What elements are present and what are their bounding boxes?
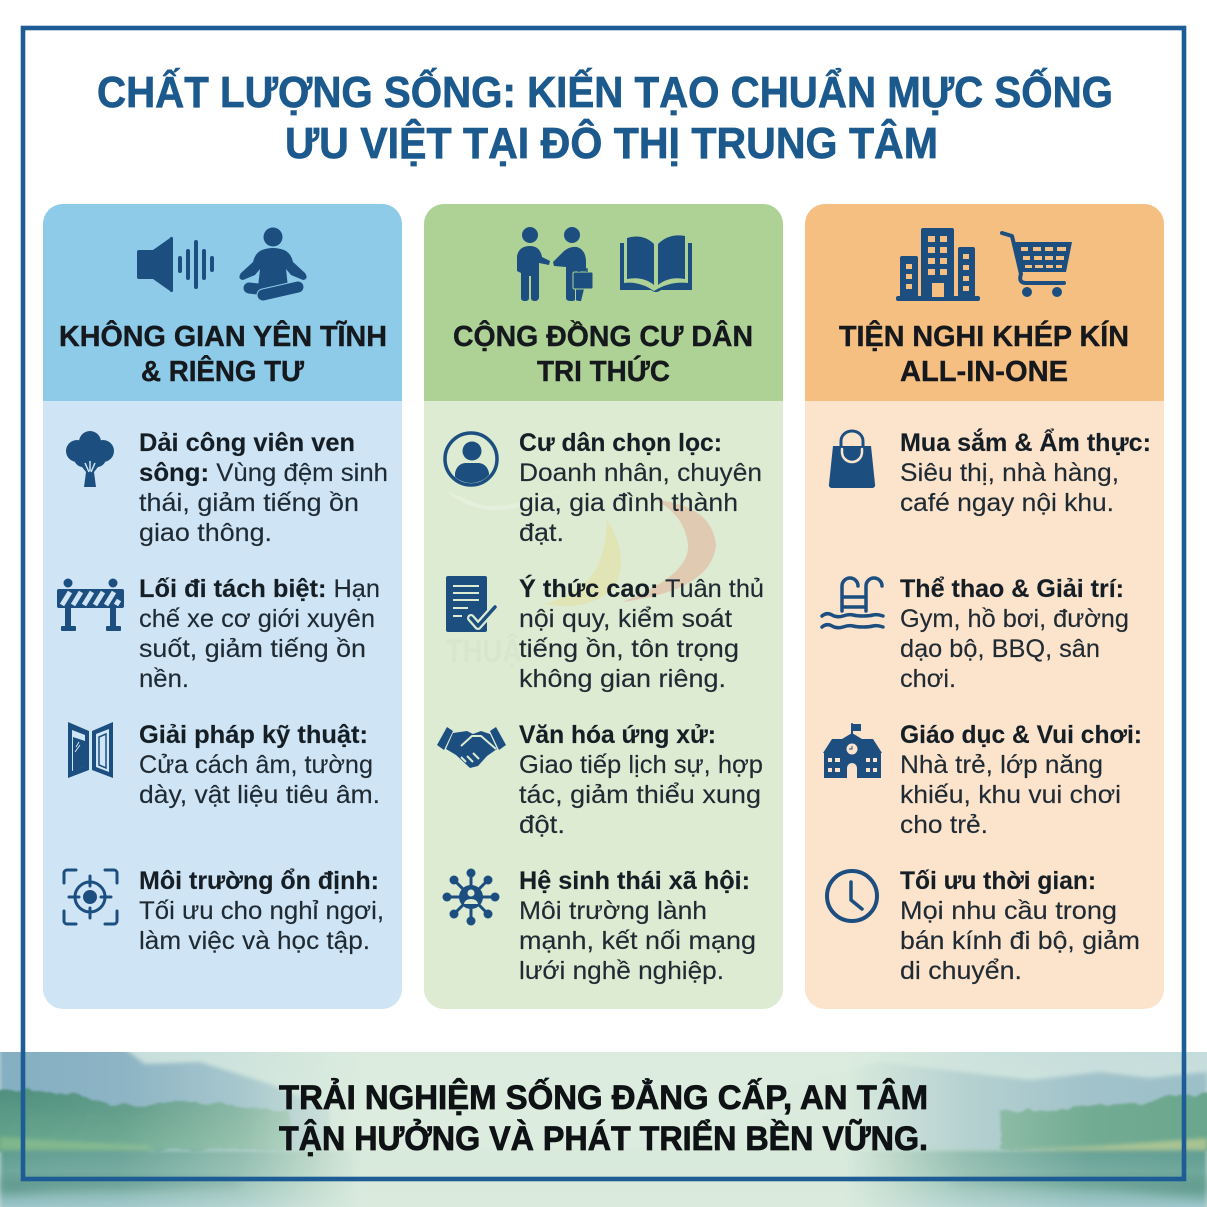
- text: stable environment: làm việc và học tập.: [139, 927, 370, 955]
- text: shopping and dining: Mua sắm & Ẩm thực:: [900, 427, 1151, 457]
- heading: ALL-IN-ONE: [900, 356, 1068, 388]
- text: time optimisation: [900, 867, 1140, 985]
- heading: CỘNG ĐỒNG CƯ DÂN: [453, 319, 753, 353]
- icon: document with checkmark: [446, 576, 495, 632]
- text: stable environment: [139, 867, 384, 955]
- text: technical solutions: Cửa cách âm, tường: [139, 751, 373, 779]
- text: social ecosystem: lưới nghề nghiệp.: [519, 957, 724, 985]
- text: education and play: cho trẻ.: [900, 811, 988, 839]
- icon: open book: [620, 235, 692, 292]
- text: education and play: Giáo dục & Vui chơi:: [900, 721, 1142, 749]
- icon: school building: [823, 724, 882, 778]
- heading: & RIÊNG TƯ: [141, 354, 305, 388]
- icon: soundproof window: [68, 722, 113, 778]
- icon: road barrier: [57, 578, 124, 631]
- text: shopping and dining: Siêu thị, nhà hàng,: [900, 459, 1119, 487]
- text: education and play: Nhà trẻ, lớp năng: [900, 751, 1103, 779]
- text: selected residents: đạt.: [519, 519, 564, 547]
- text: social ecosystem: Môi trường lành: [519, 897, 707, 925]
- text: time optimisation: bán kính đi bộ, giảm: [900, 927, 1140, 955]
- text: technical solutions: dày, vật liệu tiêu âm.: [139, 781, 380, 809]
- text: riverside park: giao thông.: [139, 519, 272, 547]
- text: sports and leisure: Thể thao & Giải trí:: [900, 575, 1124, 603]
- text: riverside park: thái, giảm tiếng ồn: [139, 489, 359, 517]
- icon: social network: [442, 868, 500, 926]
- text: riverside park: Dải công viên ven: [139, 429, 355, 457]
- text: separate paths: suốt, giảm tiếng ồn: [139, 635, 366, 663]
- panel background blue: [43, 204, 402, 1009]
- text: separate paths: Lối đi tách biệt: Hạn: [139, 575, 380, 603]
- heading: [453, 319, 753, 388]
- text: high awareness: Ý thức cao: Tuân thủ: [519, 573, 764, 603]
- icon: clock: [827, 871, 877, 921]
- icon: shopping cart: [1002, 233, 1072, 297]
- text: behaviour culture: [519, 721, 763, 839]
- heading: KHÔNG GIAN YÊN TĨNH: [59, 319, 387, 353]
- text: selected residents: gia, gia đình thành: [519, 489, 738, 517]
- text: riverside park: [139, 429, 388, 547]
- icon: handshake: [437, 727, 506, 768]
- text: high awareness: [519, 573, 764, 693]
- footer slogan: TRẢI NGHIỆM SỐNG ĐẲNG CẤP, AN TÂM: [279, 1078, 928, 1117]
- text: behaviour culture: đột.: [519, 811, 565, 839]
- icon: meditating person: [239, 228, 307, 295]
- text: behaviour culture: Giao tiếp lịch sự, hợp: [519, 751, 763, 779]
- panel: quiet and private space: [43, 204, 402, 1009]
- text: time optimisation: Tối ưu thời gian:: [900, 867, 1096, 895]
- text: shopping and dining: [900, 427, 1151, 517]
- panel: all-in-one amenities: [805, 204, 1164, 1009]
- title: ƯU VIỆT TẠI ĐÔ THỊ TRUNG TÂM: [285, 117, 938, 168]
- heading: TIỆN NGHI KHÉP KÍN: [839, 319, 1129, 353]
- text: sports and leisure: [900, 575, 1129, 693]
- text: time optimisation: Mọi nhu cầu trong: [900, 897, 1117, 925]
- icon: tree: [66, 431, 114, 487]
- icon: two people shaking hands: [517, 227, 593, 301]
- text: sports and leisure: dạo bộ, BBQ, sân: [900, 635, 1100, 663]
- text: stable environment: Môi trường ổn định:: [139, 867, 379, 895]
- text: selected residents: [519, 429, 762, 547]
- text: riverside park: sông: Vùng đệm sinh: [139, 459, 388, 487]
- text: behaviour culture: Văn hóa ứng xử:: [519, 721, 716, 749]
- footer slogan: TẬN HƯỞNG VÀ PHÁT TRIỂN BỀN VỮNG.: [279, 1120, 928, 1158]
- text: shopping and dining: café ngay nội khu.: [900, 489, 1114, 517]
- heading: TRI THỨC: [537, 354, 670, 388]
- text: sports and leisure: chơi.: [900, 665, 956, 693]
- icon: shopping bag: [829, 431, 875, 488]
- panel: educated resident community: [424, 204, 783, 1009]
- text: technical solutions: Giải pháp kỹ thuật:: [139, 721, 368, 749]
- text: selected residents: Doanh nhân, chuyên: [519, 459, 762, 487]
- icon: swimming pool: [822, 578, 883, 628]
- text: separate paths: nền.: [139, 665, 189, 693]
- watermark logo: [445, 490, 716, 669]
- text: time optimisation: di chuyển.: [900, 957, 1022, 985]
- text: behaviour culture: tác, giảm thiểu xung: [519, 781, 761, 809]
- panel background orange: [805, 204, 1164, 1009]
- text: sports and leisure: Gym, hồ bơi, đường: [900, 605, 1129, 633]
- text: stable environment: Tối ưu cho nghỉ ngơi,: [139, 897, 384, 925]
- title: CHẤT LƯỢNG SỐNG: KIẾN TẠO CHUẨN MỰC SỐNG: [97, 66, 1113, 117]
- watermark logo: THUẬ: [446, 633, 522, 669]
- heading: [839, 319, 1129, 388]
- text: education and play: [900, 721, 1142, 839]
- text: high awareness: không gian riêng.: [519, 665, 726, 693]
- panel background green: [424, 204, 783, 1009]
- icon: focus target: [64, 870, 117, 924]
- text: selected residents: Cư dân chọn lọc:: [519, 429, 722, 457]
- icon: resident avatar: [445, 433, 497, 485]
- footer slogan: [279, 1078, 928, 1158]
- heading: [59, 319, 387, 388]
- text: social ecosystem: Hệ sinh thái xã hội:: [519, 867, 750, 895]
- text: separate paths: [139, 575, 380, 693]
- text: high awareness: nội quy, kiểm soát: [519, 605, 732, 633]
- text: separate paths: chế xe cơ giới xuyên: [139, 605, 375, 633]
- icon: city buildings: [896, 228, 980, 301]
- icon: speaker with sound wave: [137, 237, 212, 292]
- text: social ecosystem: [519, 867, 756, 985]
- text: education and play: khiếu, khu vui chơi: [900, 781, 1121, 809]
- title: [97, 66, 1113, 168]
- text: social ecosystem: mạnh, kết nối mạng: [519, 927, 756, 955]
- text: high awareness: tiếng ồn, tôn trọng: [519, 635, 739, 663]
- footer landscape banner: [0, 1040, 1207, 1207]
- text: technical solutions: [139, 721, 380, 809]
